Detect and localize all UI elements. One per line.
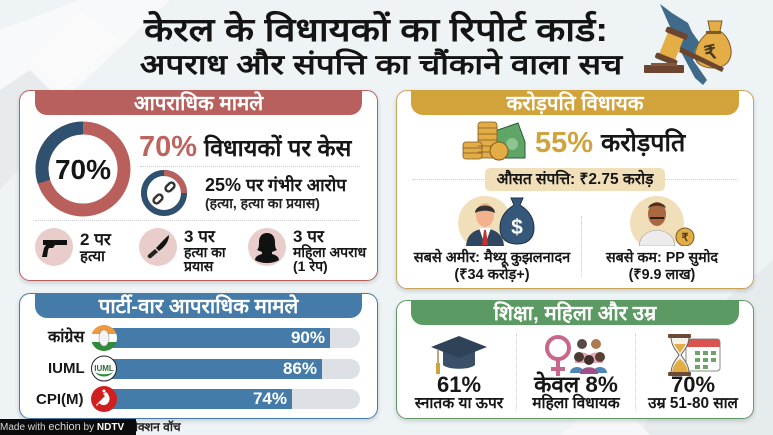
label: richest MLA: सबसे अमीर: मैथ्यू कुझलनादन [414, 250, 570, 266]
icon: richest MLA: $ [511, 216, 523, 239]
watermark bar: Made with echion by NDTV [0, 421, 124, 433]
label: CPI(M): CPI(M) [36, 391, 84, 408]
stat: 55 percent crorepati: 55% [535, 127, 593, 159]
icon: party logos: IUML [94, 364, 114, 373]
source text: इलेक्शन वॉच [124, 420, 181, 434]
stat: 2 murder: 2 पर [80, 230, 111, 249]
icon: poorest MLA [630, 196, 694, 246]
icon: Kerala map, gavel and money bag [644, 4, 732, 85]
stat: only 8 percent women [532, 371, 620, 412]
label: poorest MLA: सबसे कम: PP सुमोद [606, 250, 718, 266]
stat: 61 percent graduates: स्नातक या ऊपर [415, 395, 503, 412]
stat: 3 crimes against women: महिला अपराध [293, 244, 366, 260]
icon: richest MLA [458, 196, 534, 246]
stat: 70 percent age 51-80 [648, 372, 738, 412]
heading: criminal cases: आपराधिक मामले [134, 92, 263, 115]
label: poorest MLA [606, 248, 718, 283]
stat: 70 percent MLAs with cases: विधायकों पर केस [204, 135, 351, 161]
stat: 25 percent serious charges: 25% पर गंभीर आरोप [205, 175, 346, 195]
icon: hourglass and calendar [668, 334, 720, 376]
icon: Kerala map, gavel and money bag: ₹ [703, 42, 719, 65]
stat: 70 percent MLAs with cases [139, 131, 352, 163]
icon: poorest MLA: ₹ [682, 232, 688, 244]
stat: 61 percent graduates [414, 372, 504, 412]
icon: coins and cash [462, 122, 526, 160]
bar: CPI(M) [105, 389, 360, 409]
watermark bar [0, 419, 136, 435]
chart: 70% donut: 70% [55, 154, 111, 185]
bar chart: party-wise [36, 325, 360, 412]
stat: 70 percent MLAs with cases: 70% [139, 131, 197, 163]
heading: party-wise cases: पार्टी-वार आपराधिक मामले [99, 295, 298, 318]
stat: 3 crimes against women [248, 227, 367, 274]
stat: 3 attempted murder: प्रयास [184, 258, 213, 274]
chart: 70% donut [36, 122, 130, 216]
label: poorest MLA: (₹9.9 लाख) [629, 267, 695, 283]
stat: 55 percent crorepati [535, 127, 686, 159]
stat: 3 crimes against women: 3 पर [293, 227, 324, 246]
bar: CPI(M): 74% [253, 389, 287, 408]
label: richest MLA [413, 248, 571, 283]
stat: 25 percent serious charges [205, 175, 347, 211]
title: अपराध और संपत्ति का चौंकाने वाला सच [140, 49, 622, 80]
stat: 61 percent graduates: 61% [437, 372, 481, 397]
heading: education, women and age: शिक्षा, महिला और उम्र [494, 302, 656, 325]
title: केरल के विधायकों का रिपोर्ट कार्ड: [144, 11, 608, 48]
callout: average assets: औसत संपत्ति: ₹2.75 करोड़ [497, 171, 653, 188]
heading: party-wise cases [35, 293, 362, 318]
bar: IUML [105, 358, 360, 378]
stat: 55 percent crorepati: करोड़पति [601, 129, 685, 157]
icon: party logos [91, 325, 117, 412]
panel: party-wise cases [19, 293, 378, 419]
label: richest MLA: (₹34 करोड़+) [454, 267, 530, 283]
label: Congress: कांग्रेस [48, 329, 84, 346]
icon: women [545, 335, 607, 376]
stat: 3 attempted murder: हत्या का [184, 244, 226, 260]
stat: 70 percent age 51-80: उम्र 51-80 साल [648, 395, 738, 412]
stat: only 8 percent women: महिला विधायक [532, 395, 620, 412]
stat: only 8 percent women: केवल 8% [534, 372, 618, 397]
stat: 3 crimes against women: (1 रेप) [293, 258, 328, 274]
label: IUML: IUML [48, 360, 85, 377]
heading: criminal cases [35, 90, 362, 115]
icon: broken chain donut [141, 170, 187, 216]
heading: education, women and age [411, 300, 739, 325]
bar: IUML: 86% [283, 358, 317, 378]
stat: 3 attempted murder [139, 227, 226, 274]
heading: crorepati MLAs: करोड़पति विधायक [506, 92, 644, 115]
panel: education, women and age [396, 300, 754, 419]
stat: 2 murder [35, 228, 112, 266]
panel: criminal cases [19, 90, 378, 281]
heading: crorepati MLAs [411, 90, 739, 115]
stat: 70 percent age 51-80: 70% [671, 372, 715, 397]
stat: 3 attempted murder: 3 पर [184, 227, 215, 246]
bar: Congress: 90% [291, 328, 325, 347]
stat: 2 murder: हत्या [80, 248, 105, 265]
stat: 25 percent serious charges: (हत्या, हत्या का प्रयास) [205, 195, 320, 211]
callout: average assets [485, 168, 665, 191]
icon: graduation cap [431, 336, 487, 374]
panel: crorepati MLAs [396, 90, 754, 289]
bar: Congress [105, 328, 360, 348]
title [140, 10, 624, 80]
